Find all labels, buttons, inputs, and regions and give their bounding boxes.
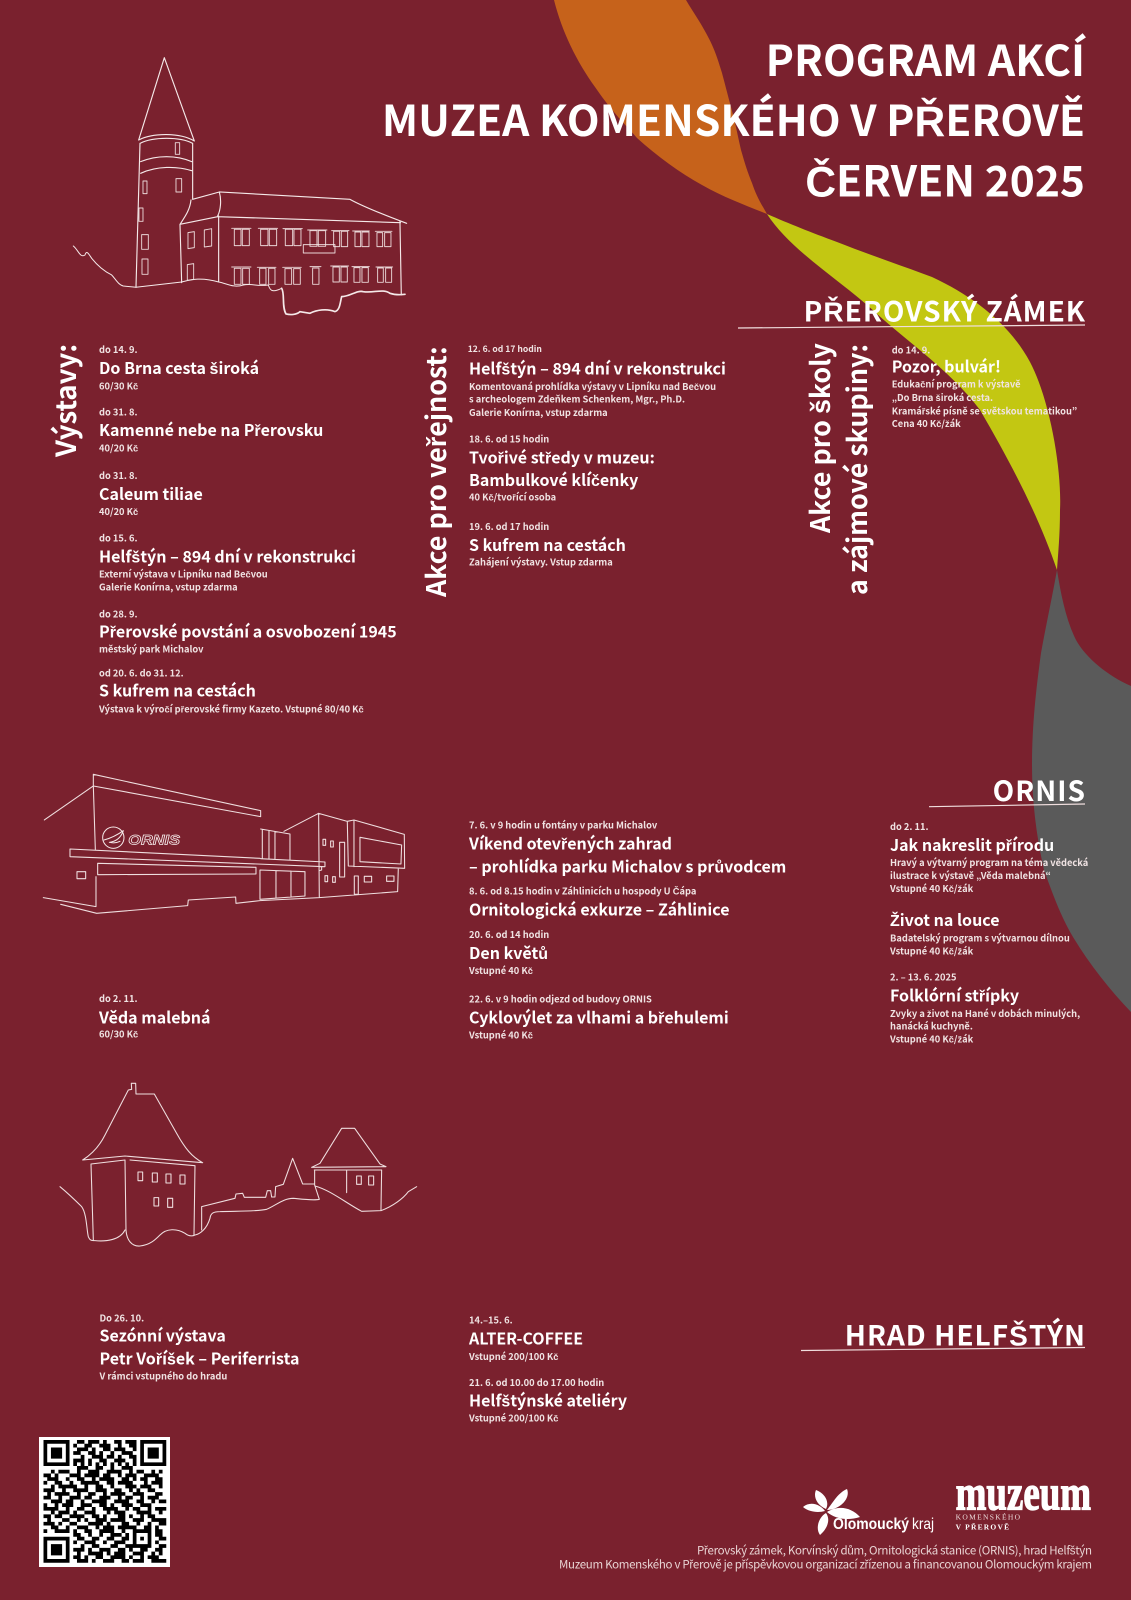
public events: ORNIS: Vstupné 40 Kč xyxy=(468,963,533,977)
exhibitions list: Galerie Konírna, vstup zdarma xyxy=(99,580,238,594)
exhibitions list: do 31. 8. xyxy=(99,468,138,482)
exhibition: Sezónní výstava: Do 26. 10. xyxy=(100,1310,144,1324)
exhibitions list: Kamenné nebe na Přerovsku xyxy=(99,417,323,441)
public events list: 18. 6. od 15 hodin xyxy=(469,431,549,445)
exhibitions list: Do Brna cesta široká xyxy=(99,355,259,379)
footer text: Přerovský zámek, Korvínský dům, Ornitologická stanice (ORNIS), hrad Helfštýn xyxy=(697,1542,1092,1558)
school events: ORNIS: Vstupné 40 Kč/žák xyxy=(889,1032,974,1046)
public events: Helfštýn xyxy=(468,1313,627,1425)
school events: ORNIS: hanácká kuchyně. xyxy=(890,1019,973,1033)
public events: ORNIS: Den květů xyxy=(469,940,548,964)
exhibitions list: S kufrem na cestách xyxy=(99,678,256,702)
public events: ORNIS: Vstupné 40 Kč xyxy=(468,1028,533,1042)
heading: Akce pro školy: Akce pro školy xyxy=(799,342,838,534)
public events: ORNIS: Cyklovýlet za vlhami a břehulemi xyxy=(469,1005,729,1029)
public events: ORNIS: 8. 6. od 8.15 hodin v Záhlinicích u hospody U Čápa xyxy=(469,884,696,898)
public events list: Helfštýn – 894 dní v rekonstrukci xyxy=(469,355,726,379)
public events: Helfštýn: Vstupné 200/100 Kč xyxy=(468,1349,558,1363)
ribbon: grey xyxy=(1032,570,1131,1012)
school events: ORNIS: 2. – 13. 6. 2025 xyxy=(890,970,956,984)
exhibitions list: Helfštýn – 894 dní v rekonstrukci xyxy=(99,543,356,567)
ribbon: yellow xyxy=(767,214,1060,570)
illustration: ORNIS building xyxy=(43,774,405,913)
exhibitions list: 40/20 Kč xyxy=(99,504,138,518)
illustration: Helfštýn castle xyxy=(60,1083,417,1246)
school events: ORNIS: Život na louce xyxy=(890,907,1000,931)
public events list: Komentovaná prohlídka výstavy v Lipníku nad Bečvou xyxy=(469,379,716,393)
public events: ORNIS: 7. 6. v 9 hodin u fontány v parku Michalov xyxy=(469,818,658,832)
title: MUZEA KOMENSKÉHO V PŘEROVĚ xyxy=(382,88,1085,149)
exhibition: Sezónní výstava: Sezónní výstava xyxy=(100,1323,226,1347)
public events list: Zahájení výstavy. Vstup zdarma xyxy=(469,555,613,569)
footer text: Muzeum Komenského v Přerově je příspěvkovou organizací zřízenou a financovanou Olomouckým krajem xyxy=(559,1556,1092,1572)
school events: Přerovský zámek: do 14. 9. xyxy=(892,342,930,356)
school events: ORNIS: ilustrace k výstavě „Věda malebná“ xyxy=(890,868,1051,882)
heading: Akce pro veřejnost: Akce pro veřejnost: xyxy=(415,346,454,598)
exhibition: Sezónní výstava xyxy=(98,1310,299,1382)
heading: Výstavy: Výstavy: xyxy=(44,344,84,458)
logo: Muzeum Komenského: V PŘEROVĚ xyxy=(956,1521,1009,1531)
title: PROGRAM AKCÍ xyxy=(766,28,1086,89)
public events: Helfštýn: 21. 6. od 10.00 do 17.00 hodin xyxy=(469,1375,604,1389)
school events: ORNIS: Vstupné 40 Kč/žák xyxy=(889,943,974,957)
section heading: Hrad Helfštýn: HRAD HELFŠTÝN xyxy=(845,1314,1086,1354)
exhibitions list: do 15. 6. xyxy=(99,531,138,545)
exhibitions list: 40/20 Kč xyxy=(99,441,138,455)
public events list: 19. 6. od 17 hodin xyxy=(469,519,549,533)
exhibitions list: do 31. 8. xyxy=(99,405,138,419)
school events: ORNIS: Jak nakreslit přírodu xyxy=(890,832,1054,856)
exhibition: Věda malebná: do 2. 11. xyxy=(99,991,138,1005)
public events list: Galerie Konírna, vstup zdarma xyxy=(469,405,608,419)
public events: Helfštýn: Helfštýnské ateliéry xyxy=(469,1388,627,1412)
logo: Muzeum Komenského: KOMENSKÉHO xyxy=(956,1511,1021,1521)
exhibitions list: do 14. 9. xyxy=(99,342,138,356)
public events: ORNIS: 20. 6. od 14 hodin xyxy=(469,927,549,941)
public events: ORNIS: Víkend otevřených zahrad xyxy=(468,830,672,854)
school events: ORNIS: Badatelský program s výtvarnou dílnou xyxy=(890,930,1070,944)
illustration: Přerov castle xyxy=(73,58,407,315)
exhibitions list: od 20. 6. do 31. 12. xyxy=(99,666,184,680)
school events: Přerovský zámek: Edukační program k výstavě xyxy=(892,377,1021,391)
exhibitions list xyxy=(98,342,397,715)
school events: ORNIS: Vstupné 40 Kč/žák xyxy=(889,881,974,895)
section heading: ORNIS: ORNIS xyxy=(993,770,1086,810)
logo: Olomoucký kraj xyxy=(803,1489,934,1535)
public events list: s archeologem Zdeňkem Schenkem, Mgr., Ph.D. xyxy=(469,392,685,406)
exhibitions list: Externí výstava v Lipníku nad Bečvou xyxy=(99,567,268,581)
section heading: Přerovský zámek: PŘEROVSKÝ ZÁMEK xyxy=(804,290,1086,330)
public events: ORNIS: Ornitologická exkurze – Záhlinice xyxy=(469,897,730,921)
ribbon: orange xyxy=(554,0,767,214)
heading: Akce pro školy: a zájmové skupiny: xyxy=(836,344,875,595)
public events list: Tvořivé středy v muzeu: xyxy=(469,444,655,468)
exhibition: Sezónní výstava: Petr Voříšek – Periferrista xyxy=(100,1345,299,1369)
exhibition: Věda malebná: Věda malebná xyxy=(98,1004,211,1028)
public events: ORNIS: 22. 6. v 9 hodin odjezd od budovy ORNIS xyxy=(469,992,652,1006)
public events list: 40 Kč/tvořící osoba xyxy=(469,490,556,504)
exhibitions list: Caleum tiliae xyxy=(99,481,203,505)
school events: ORNIS: Zvyky a život na Hané v dobách minulých, xyxy=(890,1006,1080,1020)
public events: ORNIS: – prohlídka parku Michalov s průvodcem xyxy=(469,854,786,878)
exhibition: Věda malebná: 60/30 Kč xyxy=(99,1027,138,1041)
exhibition: Sezónní výstava: V rámci vstupného do hradu xyxy=(98,1368,227,1382)
school events: ORNIS: Folklórní střípky xyxy=(890,983,1019,1007)
footer text xyxy=(559,1542,1092,1572)
QR code xyxy=(39,1437,170,1567)
title xyxy=(382,28,1086,210)
exhibitions list: 60/30 Kč xyxy=(99,378,138,392)
logo: Olomoucký kraj: kraj xyxy=(912,1516,934,1533)
public events: ORNIS xyxy=(468,818,786,1042)
school events: Přerovský zámek: Kramářské písně se světskou tematikou” xyxy=(892,403,1077,417)
public events list: 12. 6. od 17 hodin xyxy=(468,343,542,355)
public events list: Bambulkové klíčenky xyxy=(469,467,638,491)
school events: Přerovský zámek: Pozor, bulvár! xyxy=(892,354,1001,378)
exhibitions list: Výstava k výročí přerovské firmy Kazeto. Vstupné 80/40 Kč xyxy=(98,701,364,715)
heading: Akce pro školy xyxy=(799,342,875,595)
public events list xyxy=(468,343,726,569)
title: ČERVEN 2025 xyxy=(805,148,1085,210)
school events: ORNIS xyxy=(889,819,1088,1046)
exhibitions list: městský park Michalov xyxy=(99,642,204,656)
exhibitions list: Přerovské povstání a osvobození 1945 xyxy=(99,618,397,642)
school events: ORNIS: do 2. 11. xyxy=(890,819,929,833)
exhibition: Věda malebná xyxy=(98,991,211,1041)
school events: ORNIS: Hravý a výtvarný program na téma vědecká xyxy=(890,855,1088,869)
school events: Přerovský zámek: „Do Brna široká cesta. xyxy=(892,390,993,404)
public events: Helfštýn: 14.–15. 6. xyxy=(469,1313,513,1327)
illustration: ORNIS building: ORNIS xyxy=(128,831,181,847)
exhibitions list: do 28. 9. xyxy=(99,606,138,620)
logo: Muzeum Komenského xyxy=(956,1464,1091,1531)
school events: Přerovský zámek: Cena 40 Kč/žák xyxy=(892,416,961,430)
public events list: S kufrem na cestách xyxy=(469,532,626,556)
public events: Helfštýn: Vstupné 200/100 Kč xyxy=(468,1411,558,1425)
school events: Přerovský zámek xyxy=(892,342,1077,430)
logo: Olomoucký kraj: Olomoucký xyxy=(833,1516,909,1533)
public events: Helfštýn: ALTER-COFFEE xyxy=(468,1325,583,1349)
